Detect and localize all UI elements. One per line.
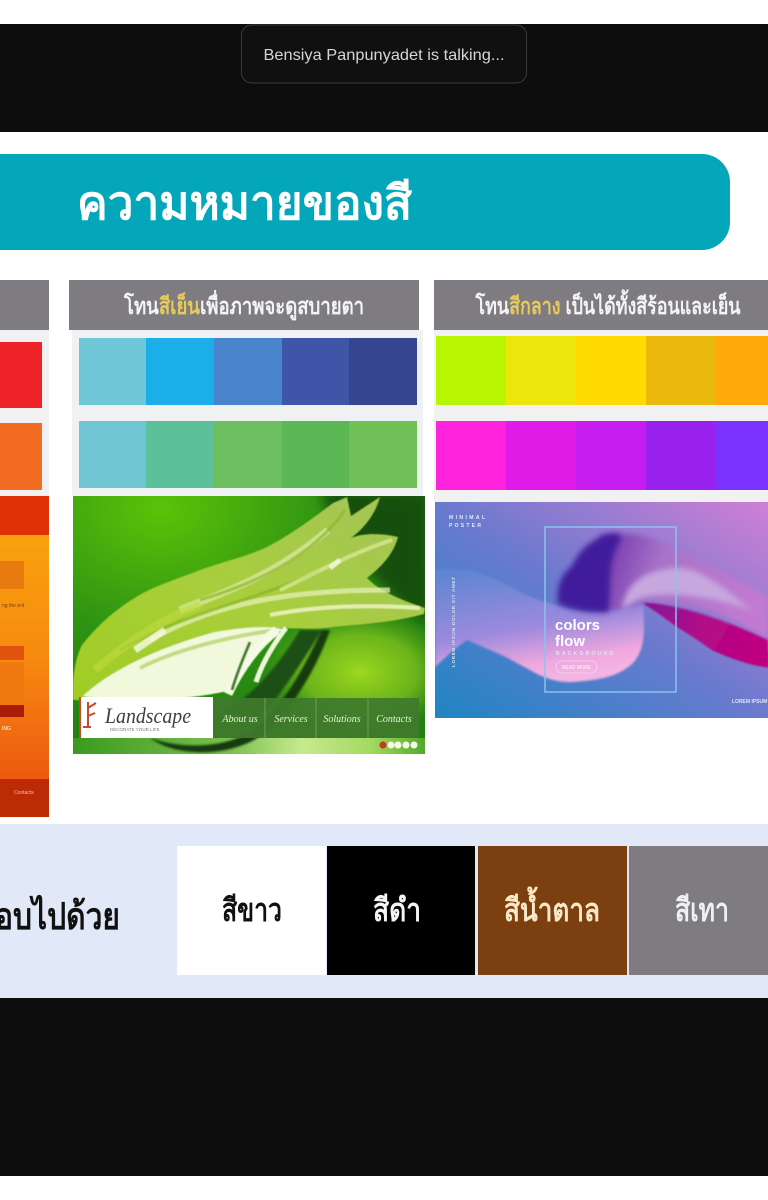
neutral swatch row 2 (436, 421, 768, 490)
swatch: brown (478, 846, 627, 975)
cool swatch background (72, 330, 423, 496)
Landscape logo (79, 697, 213, 738)
poster text: POSTER (449, 523, 481, 529)
cool header: โทนสีเย็นเพื่อภาพจะดูสบายตา (123, 289, 364, 321)
swatch: white (177, 846, 326, 975)
poster text (449, 515, 767, 705)
warm website sample (0, 496, 49, 817)
swatch: white: สีขาว (222, 892, 282, 928)
top black video bar (0, 24, 768, 132)
bottom neutral colours band (0, 824, 768, 998)
swatch: black (327, 846, 475, 975)
title banner (0, 154, 730, 250)
poster text: LOREM IPSUM (732, 699, 767, 705)
site navigation (213, 698, 419, 738)
swatch: brown: สีน้ำตาล (504, 886, 600, 928)
site navigation: Contacts (376, 714, 412, 725)
poster text: MINIMAL (449, 515, 485, 521)
swatch: black: สีดำ (373, 892, 421, 928)
neutral header (434, 280, 768, 330)
warm website sample: Contacts (14, 790, 34, 796)
neutral poster sample: colors flow (435, 502, 768, 718)
panel: neutral tones (434, 280, 768, 718)
bottom black video bar (0, 998, 768, 1176)
Landscape logo: DECORATE YOUR LIFE (110, 727, 160, 732)
panel: cool tones (69, 280, 455, 754)
Landscape logo: Landscape (104, 703, 191, 728)
dark stem (150, 630, 330, 752)
warm website sample: ING (2, 726, 11, 732)
panel: warm tones (cropped) (0, 280, 49, 817)
warm swatch red (0, 342, 42, 408)
plant (73, 497, 425, 700)
warm swatch orange (0, 423, 42, 490)
neutral swatch background (434, 330, 768, 502)
slider dots (380, 742, 418, 748)
warm website sample: ng the ent (2, 603, 25, 609)
poster text: BACKGROUND (556, 651, 613, 657)
poster text: LOREM IPSUM DOLOR SIT AMET (451, 577, 456, 667)
poster text: colors (555, 617, 600, 634)
speaker notification: Bensiya Panpunyadet is talking... (264, 47, 504, 64)
cool header (69, 280, 419, 330)
flow shape (435, 534, 768, 682)
bottom light strip (73, 738, 425, 754)
swatch: grey: สีเทา (675, 892, 729, 928)
cool swatch row 2 (79, 421, 417, 488)
poster text: READ MORE (562, 665, 592, 671)
swatch: grey (629, 846, 768, 975)
speaker notification (242, 25, 526, 83)
warm header (0, 280, 49, 330)
poster text: flow (555, 633, 585, 650)
site navigation: Solutions (323, 714, 361, 725)
neutral swatch row 1 (436, 336, 768, 405)
warm swatch background (0, 330, 49, 496)
title banner: ความหมายของสี (77, 176, 412, 229)
poster frame (545, 527, 676, 692)
cool website sample: green plant (73, 490, 455, 754)
site navigation: Services (274, 714, 308, 725)
cool swatch row 1 (79, 338, 417, 405)
site navigation: About us (221, 714, 258, 725)
